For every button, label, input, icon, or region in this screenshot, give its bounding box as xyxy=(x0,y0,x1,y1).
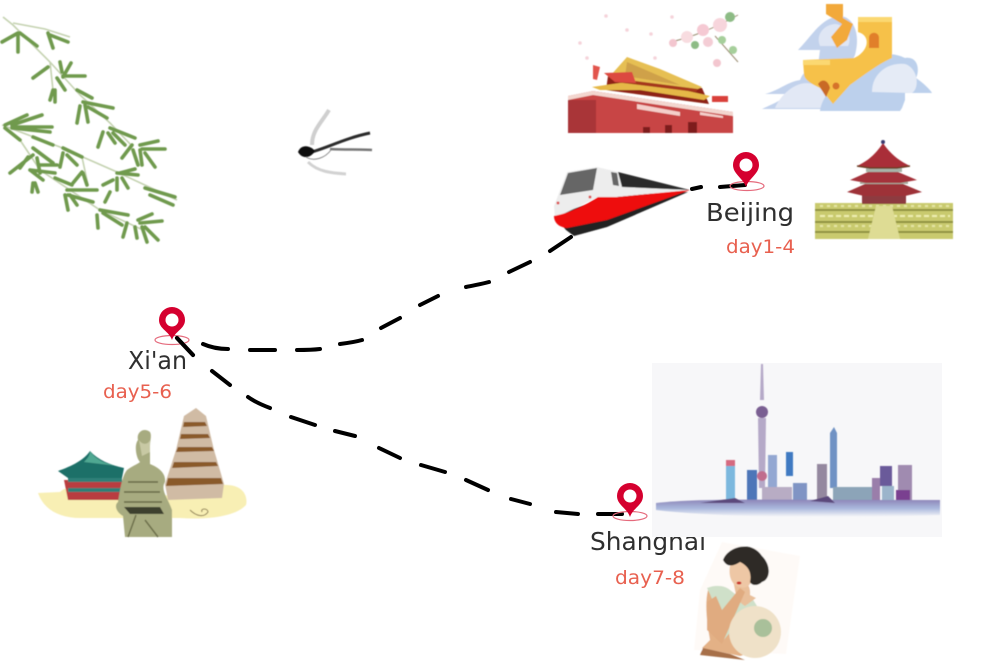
label: day7-8: day7-8 xyxy=(615,567,685,589)
illustration: Xi'an landmarks xyxy=(38,408,246,537)
pin: Shanghai xyxy=(613,483,647,520)
label: Beijing: Beijing xyxy=(706,198,794,227)
label: Xi'an: Xi'an xyxy=(128,346,187,375)
route: Xi'an to Beijing xyxy=(177,185,745,355)
illustration: high-speed train xyxy=(554,167,690,236)
illustration: Great Wall with clouds xyxy=(762,4,932,111)
label: day1-4: day1-4 xyxy=(726,236,795,258)
illustration: cherry blossom branch xyxy=(578,12,738,67)
illustration: bamboo branches xyxy=(2,17,177,242)
illustration: Shanghai skyline xyxy=(652,363,942,537)
pin: Beijing xyxy=(730,152,764,190)
pin: Xi'an xyxy=(155,307,193,355)
illustration: Temple of Heaven xyxy=(815,140,953,239)
label: Shanghai: Shanghai xyxy=(590,527,706,556)
illustration: woman in qipao with fan xyxy=(694,542,800,660)
illustration: swallow xyxy=(298,110,372,174)
illustration: Tiananmen gate xyxy=(568,57,733,133)
label: day5-6: day5-6 xyxy=(103,381,172,403)
route: Xi'an to Shanghai xyxy=(212,371,622,514)
